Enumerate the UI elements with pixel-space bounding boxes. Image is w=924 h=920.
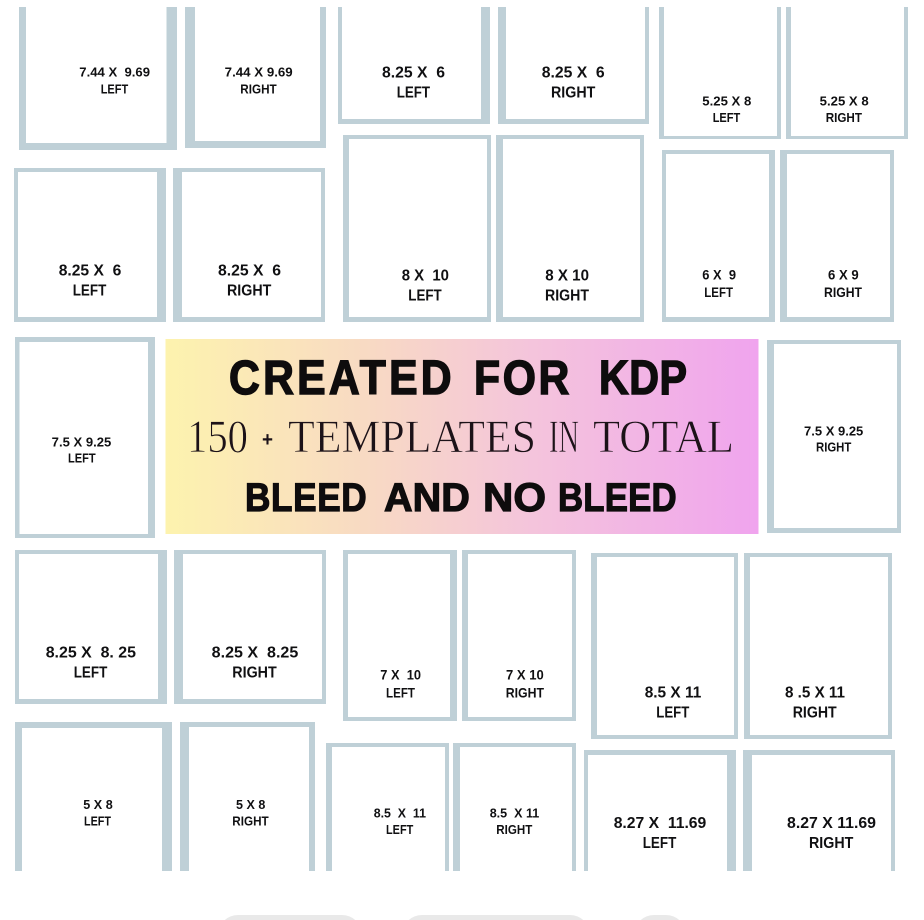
frame: 7.44 x 9.69 right: 7.44 X 9.69 [225, 65, 293, 80]
frame: 7.44 x 9.69 right [185, 7, 326, 148]
frame: 7 x 10 right: 7 X 10 [506, 666, 544, 682]
frame: 8 x 10 left: 8 X 10 [402, 267, 449, 284]
frame: 7 x 10 left [343, 550, 457, 721]
frame: 8.25 x 6 right (second row) [173, 168, 325, 322]
frame: 8.5 x 11 right (bottom row): RIGHT [496, 822, 532, 837]
banner tagline: NO [483, 475, 546, 520]
banner subheading [187, 411, 734, 463]
frame: 8 x 10 right: 8 X 10 [545, 267, 589, 284]
frame: 8.25 x 8.25 left: 8.25 X 8. 25 [46, 644, 136, 661]
banner heading: CREATED [229, 350, 455, 405]
frame: 8.25 x 6 left (top row): LEFT [397, 85, 430, 102]
frame: 7.5 x 9.25 right [767, 340, 901, 533]
frame: 5.25 x 8 left: LEFT [713, 110, 740, 125]
frame: 8.25 x 6 left (second row) [14, 168, 166, 322]
frame: 7.44 x 9.69 left: LEFT [101, 81, 128, 96]
frame: 7.44 x 9.69 right: RIGHT [240, 81, 277, 96]
frame: 8.5 x 11 right: RIGHT [793, 704, 837, 721]
frame: 5.25 x 8 left: 5.25 X 8 [702, 94, 751, 109]
frame: 5 x 8 left: LEFT [84, 814, 111, 829]
frame: 8.25 x 6 left (second row): 8.25 X 6 [59, 262, 121, 279]
frame: 8.25 x 6 right (top row): 8.25 X 6 [542, 65, 605, 82]
banner tagline: BLEED [245, 475, 367, 519]
frame: 8.5 x 11 left: 8.5 X 11 [645, 684, 701, 701]
banner: created for KDP [166, 339, 758, 534]
frame: 8.5 x 11 left: LEFT [656, 704, 689, 721]
frame: 6 x 9 left: LEFT [704, 284, 733, 300]
frame: 8.27 x 11.69 left [584, 750, 736, 871]
frame: 8.25 x 6 right (second row): RIGHT [227, 283, 271, 300]
frame: 8.27 x 11.69 right: RIGHT [809, 835, 853, 852]
bottom pill: third [634, 915, 686, 920]
frame: 5.25 x 8 right: 5.25 X 8 [820, 94, 869, 109]
bottom pill: first [218, 915, 362, 920]
frame: 8.27 x 11.69 right: 8.27 X 11.69 [787, 815, 876, 832]
frame: 8.25 x 6 right (top row): RIGHT [551, 85, 595, 102]
frame: 6 x 9 right [780, 150, 894, 322]
frame: 5 x 8 right [180, 722, 315, 871]
frame: 8.5 x 11 right: 8 .5 X 11 [785, 684, 845, 701]
frame: 8.25 x 8.25 right: RIGHT [232, 665, 277, 682]
frame: 8.25 x 8.25 right: 8.25 X 8.25 [212, 644, 298, 661]
frame: 8.25 x 6 left (top row) [338, 7, 490, 124]
frame: 7.5 x 9.25 left: LEFT [68, 450, 96, 465]
frame: 5.25 x 8 left [659, 7, 781, 139]
banner subheading: + [262, 429, 273, 451]
banner tagline [245, 475, 677, 520]
bottom pill: second [402, 915, 590, 920]
frame: 5.25 x 8 right [786, 7, 908, 139]
frame: 8.25 x 6 left (second row): LEFT [73, 283, 106, 300]
banner heading: FOR [474, 350, 572, 405]
frame: 8.25 x 6 right (top row) [498, 7, 649, 124]
frame: 7.5 x 9.25 right: RIGHT [816, 440, 851, 455]
frame: 7.5 x 9.25 left: 7.5 X 9.25 [52, 434, 111, 449]
frame: 5 x 8 left [15, 722, 172, 871]
frame: 5 x 8 right: 5 X 8 [236, 797, 265, 812]
frame: 8 x 10 left: LEFT [408, 287, 442, 304]
frame: 7 x 10 left: 7 X 10 [380, 666, 421, 682]
frame: 8.25 x 8.25 right [174, 550, 326, 704]
frame: 8.25 x 6 left (top row): 8.25 X 6 [382, 65, 445, 82]
frame: 7 x 10 right: RIGHT [506, 684, 544, 700]
frame: 8 x 10 right: RIGHT [545, 287, 589, 304]
frame: 7.44 x 9.69 left: 7.44 X 9.69 [79, 65, 150, 80]
frame: 8.25 x 8.25 left [15, 550, 167, 704]
frame: 8 x 10 left [343, 135, 491, 322]
frame: 8.5 x 11 left (bottom row): 8.5 X 11 [374, 806, 426, 821]
frame: 8.5 x 11 right [744, 553, 892, 739]
banner subheading: 150 [187, 411, 248, 463]
banner gradient background [166, 339, 758, 534]
frame: 5 x 8 right: RIGHT [232, 814, 269, 829]
frame: 7.44 x 9.69 left [19, 7, 177, 150]
banner subheading: TEMPLATES [288, 411, 536, 463]
banner tagline: BLEED [558, 475, 677, 520]
frame: 7 x 10 right [462, 550, 576, 721]
frame: 8.5 x 11 left [591, 553, 738, 739]
frame: 8.27 x 11.69 left: 8.27 X 11.69 [614, 815, 706, 832]
banner heading: KDP [599, 350, 688, 405]
frame: 8.25 x 8.25 left: LEFT [74, 665, 107, 682]
frame: 8.5 x 11 right (bottom row): 8.5 X 11 [490, 806, 539, 821]
banner heading [229, 350, 688, 405]
frame: 8.5 x 11 right (bottom row) [453, 743, 576, 871]
frame: 6 x 9 right: RIGHT [824, 284, 862, 300]
frame: 8.5 x 11 left (bottom row): LEFT [386, 822, 413, 837]
banner tagline: AND [384, 476, 470, 520]
frame: 5.25 x 8 right: RIGHT [826, 110, 862, 125]
frame: 8.27 x 11.69 left: LEFT [643, 835, 676, 852]
frame: 6 x 9 left: 6 X 9 [702, 266, 736, 282]
frame: 7 x 10 left: LEFT [386, 684, 415, 700]
banner subheading: IN [549, 411, 579, 463]
banner subheading: TOTAL [593, 411, 734, 463]
frame: 8.5 x 11 left (bottom row) [326, 743, 449, 871]
frame: 7.5 x 9.25 left [15, 337, 155, 538]
frame: 8.27 x 11.69 right [743, 750, 895, 871]
frame: 6 x 9 right: 6 X 9 [828, 266, 859, 282]
frame: 8 x 10 right [496, 135, 644, 322]
frame: 6 x 9 left [662, 150, 775, 322]
frame: 8.25 x 6 right (second row): 8.25 X 6 [218, 262, 281, 279]
frame: 5 x 8 left: 5 X 8 [83, 797, 113, 812]
frame: 7.5 x 9.25 right: 7.5 X 9.25 [804, 423, 863, 438]
